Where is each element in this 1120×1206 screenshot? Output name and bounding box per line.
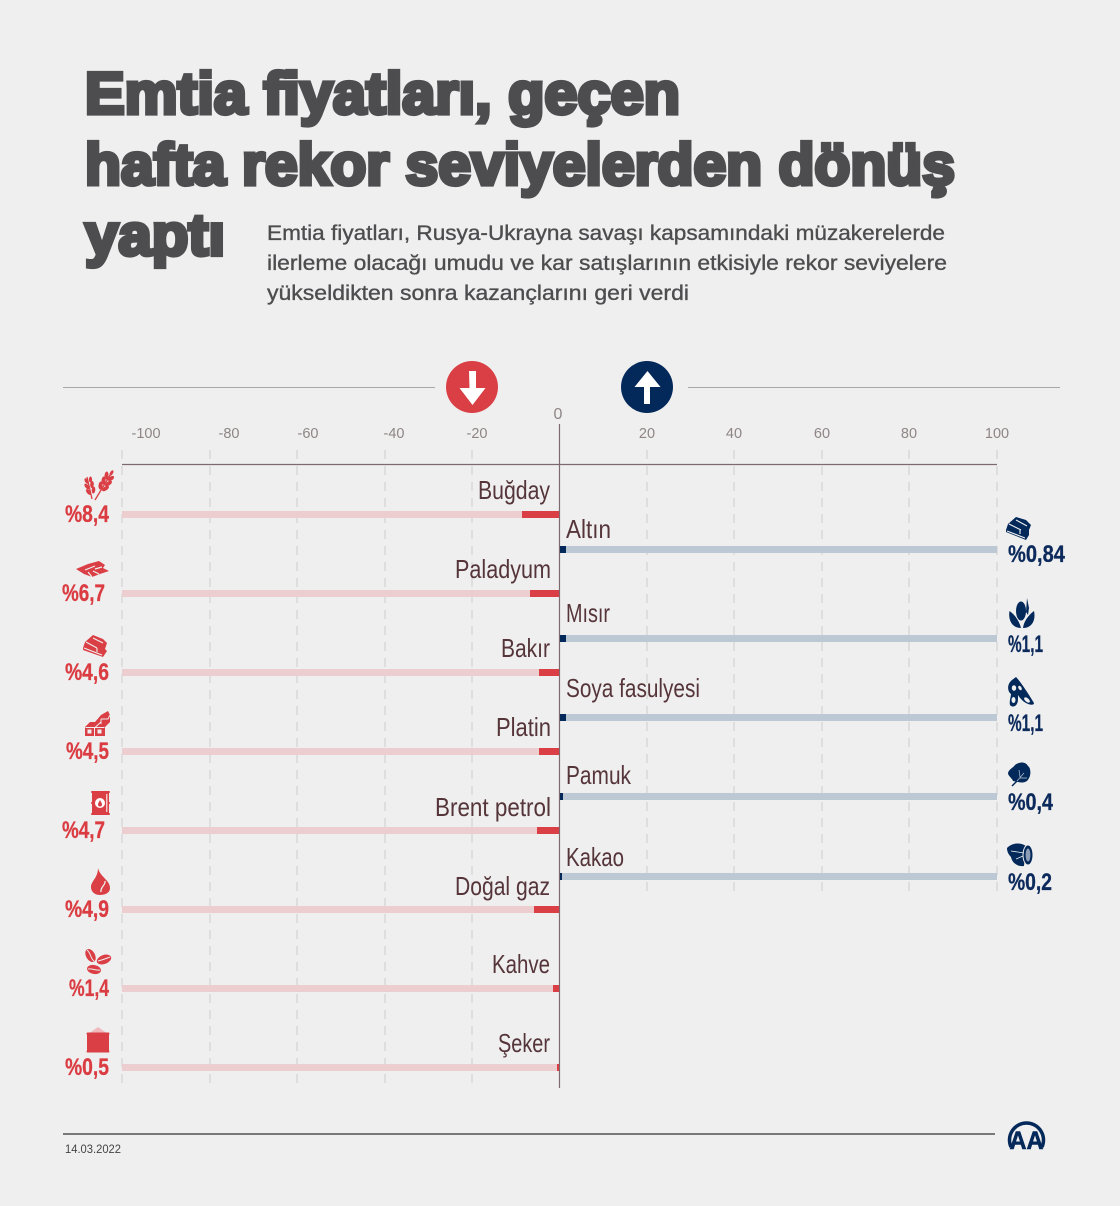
commodity labels: Kakao [566, 842, 624, 872]
axis labels [131, 406, 1009, 442]
subtitle text block: Emtia fiyatları, Rusya-Ukrayna savaşı kapsamındaki müzakerelerde [267, 221, 945, 245]
positive percentages [1008, 541, 1066, 896]
icon: corn [1009, 598, 1035, 628]
positive percentages: %1,1 [1008, 710, 1043, 737]
axis labels: -100 [131, 426, 161, 442]
commodity labels: Buğday [478, 475, 550, 505]
positive percentages: %1,1 [1008, 631, 1043, 658]
bar: Bakır [122, 669, 559, 676]
bar: Doğal gaz [122, 906, 559, 913]
bar: Şeker [122, 1064, 559, 1071]
icon: cotton leaf [1008, 762, 1030, 786]
title: Emtia fiyatları, geçen [85, 62, 680, 126]
negative percentages: %4,7 [62, 817, 105, 844]
commodity labels: Soya fasulyesi [566, 673, 700, 703]
commodity labels: Altın [566, 514, 611, 544]
title [85, 62, 955, 268]
negative percentages: %1,4 [69, 975, 109, 1002]
commodity labels: Paladyum [455, 554, 551, 584]
icon: gold bars [1006, 517, 1031, 540]
positive percentages: %0,4 [1008, 789, 1054, 816]
negative percentages: %4,9 [65, 896, 109, 923]
axis labels: 20 [639, 426, 655, 442]
icon: down arrow [446, 361, 498, 413]
icon: soybean [1008, 677, 1034, 707]
positive bars [560, 546, 997, 880]
bar: Pamuk [560, 793, 997, 800]
negative percentages [62, 501, 110, 1081]
commodity labels: Mısır [566, 598, 610, 628]
bar: Platin [122, 748, 559, 755]
commodity labels [435, 475, 700, 1058]
bar: Kahve [122, 985, 559, 992]
icon: sugar sack [86, 1027, 110, 1052]
axis labels: -60 [298, 426, 318, 442]
commodity labels: Bakır [501, 633, 550, 663]
negative percentages: %4,5 [66, 738, 109, 765]
bar: Paladyum [122, 590, 559, 597]
commodity labels: Pamuk [566, 760, 632, 790]
axis labels: -80 [219, 426, 239, 442]
title: yaptı [85, 203, 225, 268]
bar: Altın [560, 546, 997, 553]
icon: wheat [83, 470, 115, 500]
negative percentages: %0,5 [65, 1054, 109, 1081]
icon: up arrow [621, 361, 673, 413]
grid lines [122, 450, 997, 1085]
commodity labels: Şeker [498, 1028, 550, 1058]
negative percentages: %8,4 [65, 501, 110, 528]
positive percentages: %0,84 [1008, 541, 1066, 568]
bar: Brent petrol [122, 827, 559, 834]
icon: flame [91, 868, 110, 895]
commodity labels: Platin [496, 712, 551, 742]
commodity labels: Brent petrol [435, 792, 551, 822]
icon: copper ingots [83, 635, 107, 657]
axis labels: 40 [726, 426, 742, 442]
icon: coffee beans [83, 947, 113, 975]
axis labels: -20 [467, 426, 487, 442]
subtitle text block: yükseldikten sonra kazançlarını geri verdi [267, 281, 689, 305]
bar: Soya fasulyesi [560, 714, 997, 721]
logo: AA: AA [1010, 1127, 1044, 1155]
axis labels: 0 [554, 406, 563, 423]
commodity labels: Kahve [492, 949, 550, 979]
date: 14.03.2022 [65, 1144, 121, 1156]
axis labels: 80 [901, 426, 917, 442]
icon: cocoa [1007, 844, 1033, 866]
bar: Buğday [122, 511, 559, 518]
icon: palladium bars [76, 561, 109, 577]
bar: Mısır [560, 635, 997, 642]
negative bars [122, 511, 559, 1071]
icon: oil barrel [91, 791, 110, 815]
subtitle text block: ilerleme olacağı umudu ve kar satışlarının etkisiyle rekor seviyelere [267, 251, 947, 275]
negative percentages: %6,7 [62, 580, 105, 607]
bar: Kakao [560, 873, 997, 880]
subtitle text block [267, 221, 947, 305]
title: hafta rekor seviyelerden dönüş [85, 132, 955, 198]
commodity labels: Doğal gaz [455, 871, 550, 901]
negative percentages: %4,6 [65, 659, 109, 686]
axis labels: 100 [985, 426, 1009, 442]
icon: platinum blocks [85, 711, 110, 736]
axis labels: 60 [814, 426, 830, 442]
positive percentages: %0,2 [1008, 869, 1052, 896]
axis labels: -40 [384, 426, 404, 442]
